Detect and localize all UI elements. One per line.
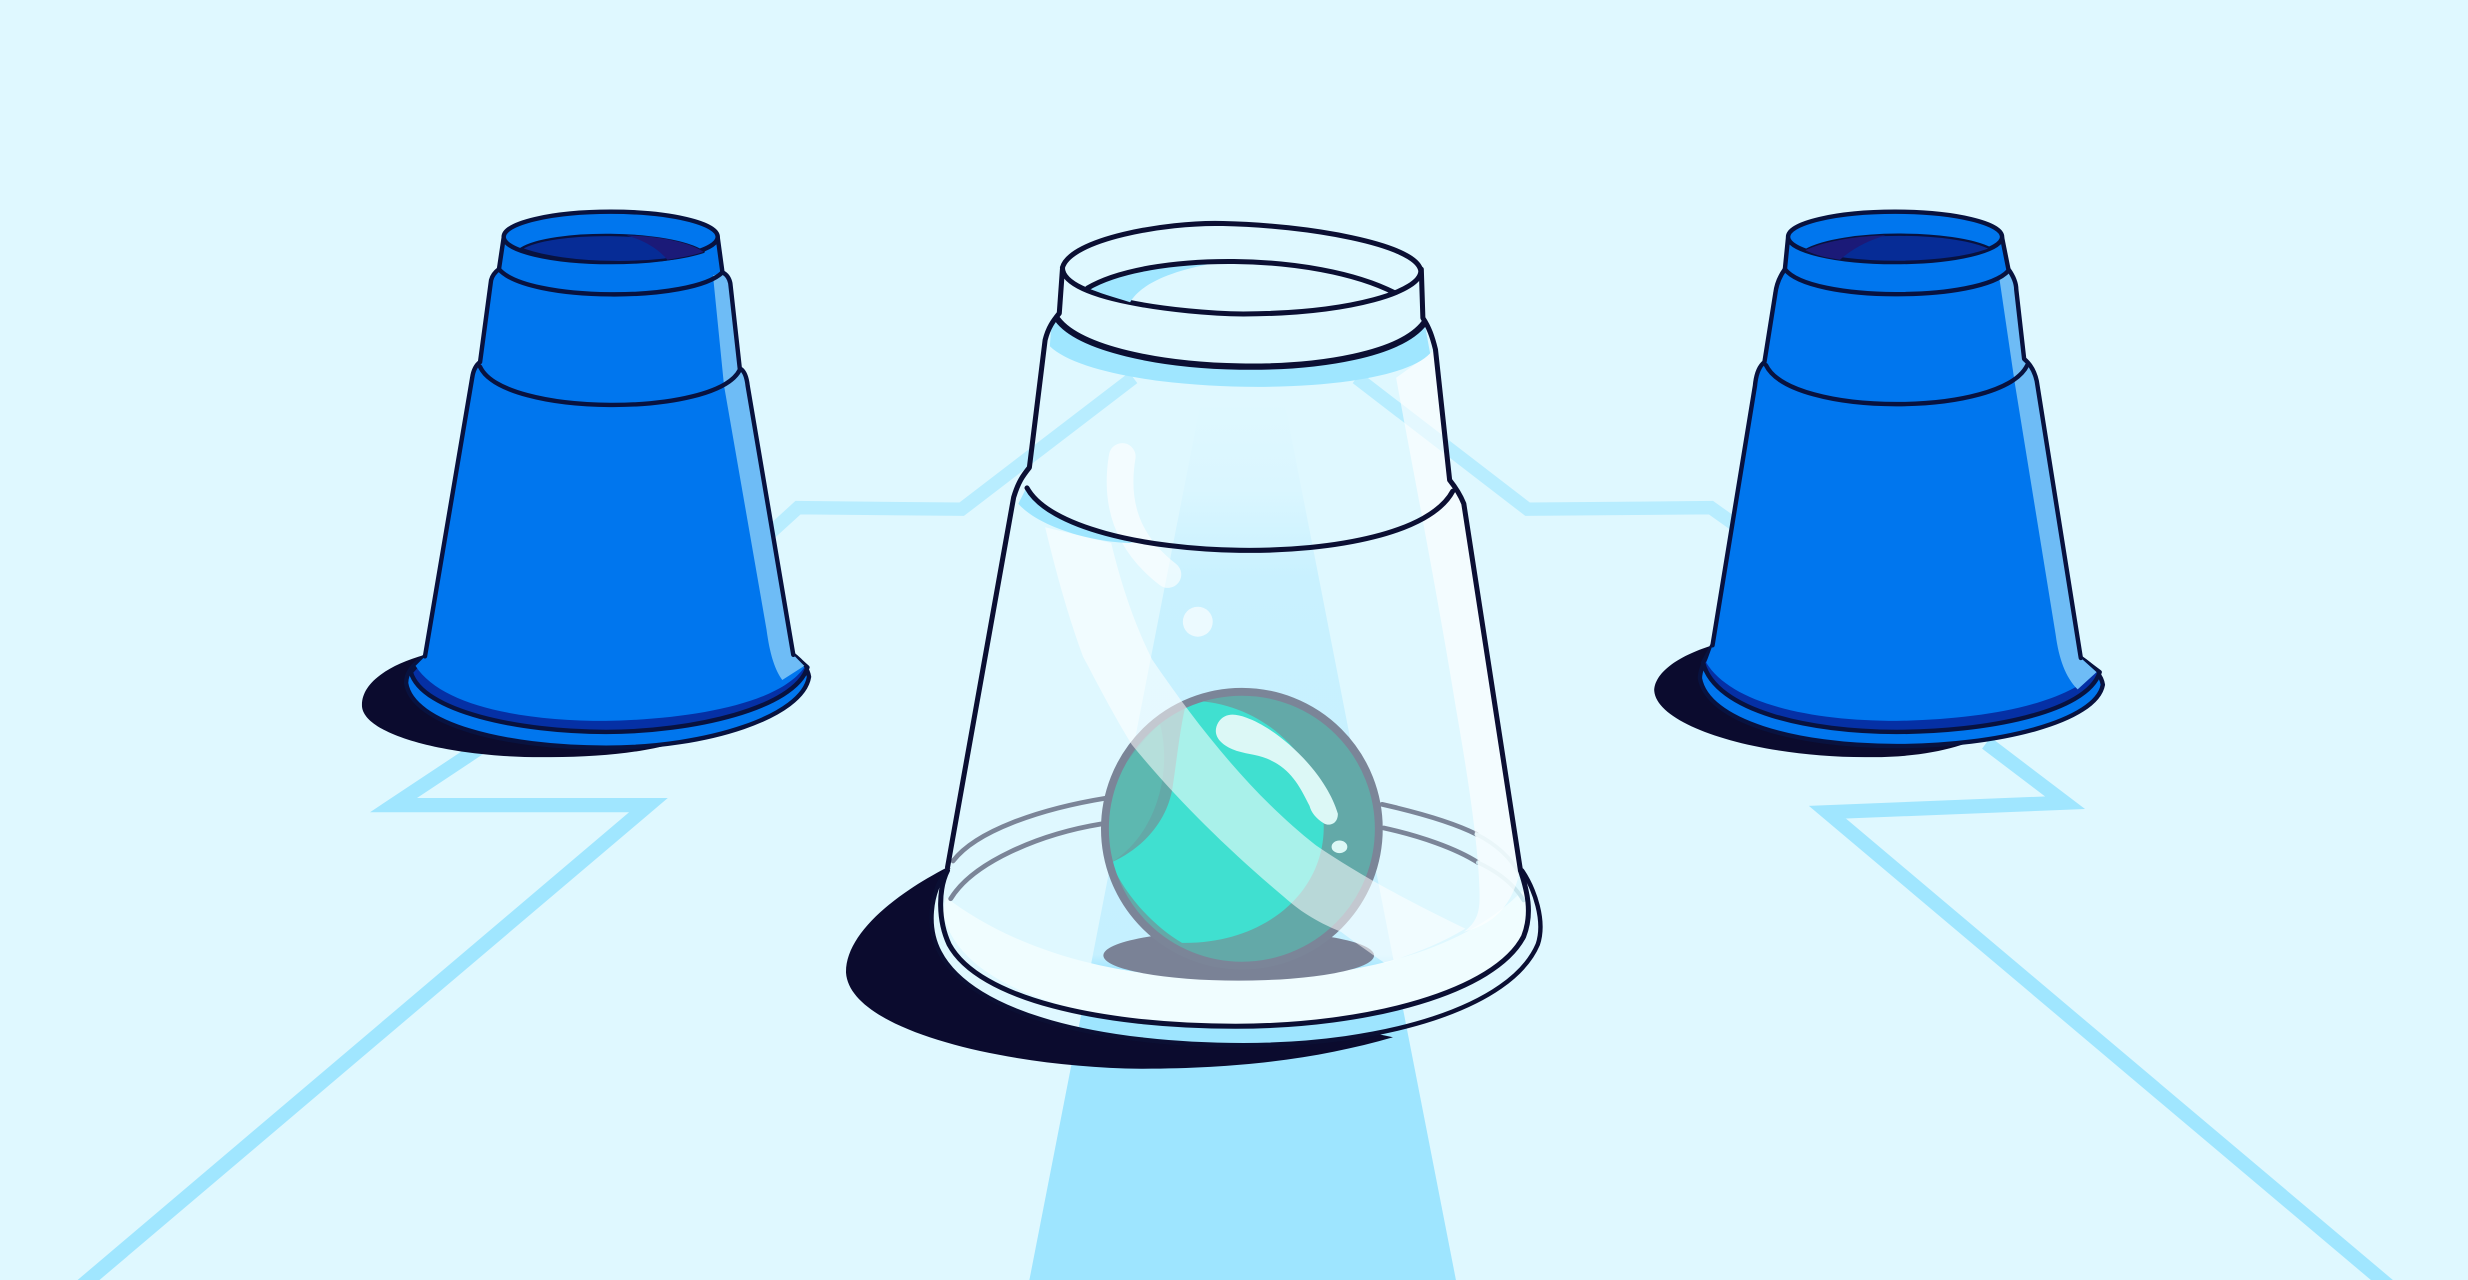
glass band arcs xyxy=(1058,320,1424,367)
glass inner crescent xyxy=(1088,264,1212,302)
glass lower arc xyxy=(1027,488,1453,550)
left blue cup xyxy=(362,212,809,757)
illustration: shell game with glass cup and marble xyxy=(78,210,2393,1280)
glass outer brim xyxy=(932,869,1540,1045)
left cup brim xyxy=(406,655,809,748)
right cup body xyxy=(1706,238,2097,721)
right cup band arcs xyxy=(1766,269,2027,404)
left cup highlight xyxy=(713,272,804,680)
glass floor bright ring xyxy=(943,889,1528,1026)
marble outline xyxy=(1105,692,1379,966)
back rim lines left xyxy=(951,798,1107,899)
right cup top opening xyxy=(1788,212,2002,262)
left cup dark band xyxy=(411,655,807,732)
glass dot highlight xyxy=(1183,607,1213,637)
right cup highlight xyxy=(1999,269,2097,689)
path line: upper left xyxy=(771,378,1133,532)
marble highlight xyxy=(1216,715,1338,825)
right blue cup xyxy=(1654,212,2103,757)
glass opening xyxy=(1062,223,1421,314)
left cup body xyxy=(416,238,804,721)
glass reflection band xyxy=(1045,527,1465,963)
right cup hole shade xyxy=(1805,235,1886,260)
marble left crescent xyxy=(1109,750,1162,861)
right cup inner hole xyxy=(1805,235,1991,262)
marble shadow xyxy=(1103,930,1374,981)
right cup dark band xyxy=(1703,645,2100,732)
glass inner rim xyxy=(941,870,1528,1026)
glass right reflection xyxy=(1396,349,1520,932)
path line: lower right xyxy=(1827,743,2411,1280)
center glass cup with marble xyxy=(846,220,1543,1069)
right cup side outline xyxy=(1712,238,2081,658)
glass cup brim fill xyxy=(932,869,1540,1045)
left cup inner hole xyxy=(521,235,704,262)
glass curved highlight xyxy=(1120,456,1168,575)
beam seen through brim xyxy=(1078,872,1406,1043)
glass lower band tint xyxy=(1018,488,1133,543)
back rim pale right xyxy=(1476,834,1524,900)
left cup band arcs xyxy=(480,269,740,405)
glass upper band tint xyxy=(1050,323,1430,387)
path line: upper right xyxy=(1357,378,1741,529)
marble sparkle xyxy=(1332,841,1347,853)
marble base xyxy=(1105,692,1379,966)
glass neck fill xyxy=(1058,269,1424,367)
left cup shadow xyxy=(362,655,708,757)
glass cup shadow xyxy=(846,867,1393,1069)
left cup hole shade xyxy=(626,235,704,260)
marble xyxy=(1104,692,1379,966)
right cup shadow xyxy=(1654,645,1999,757)
path line: lower left xyxy=(63,748,648,1280)
left cup top opening xyxy=(504,212,718,262)
glass inner lip xyxy=(1088,261,1395,293)
marble bright body xyxy=(1111,700,1324,943)
back rim lines right xyxy=(1382,804,1478,863)
left cup side outline xyxy=(425,238,793,656)
right cup brim xyxy=(1700,645,2103,746)
light beam xyxy=(1029,401,1456,1280)
glass cup outline xyxy=(948,269,1520,870)
